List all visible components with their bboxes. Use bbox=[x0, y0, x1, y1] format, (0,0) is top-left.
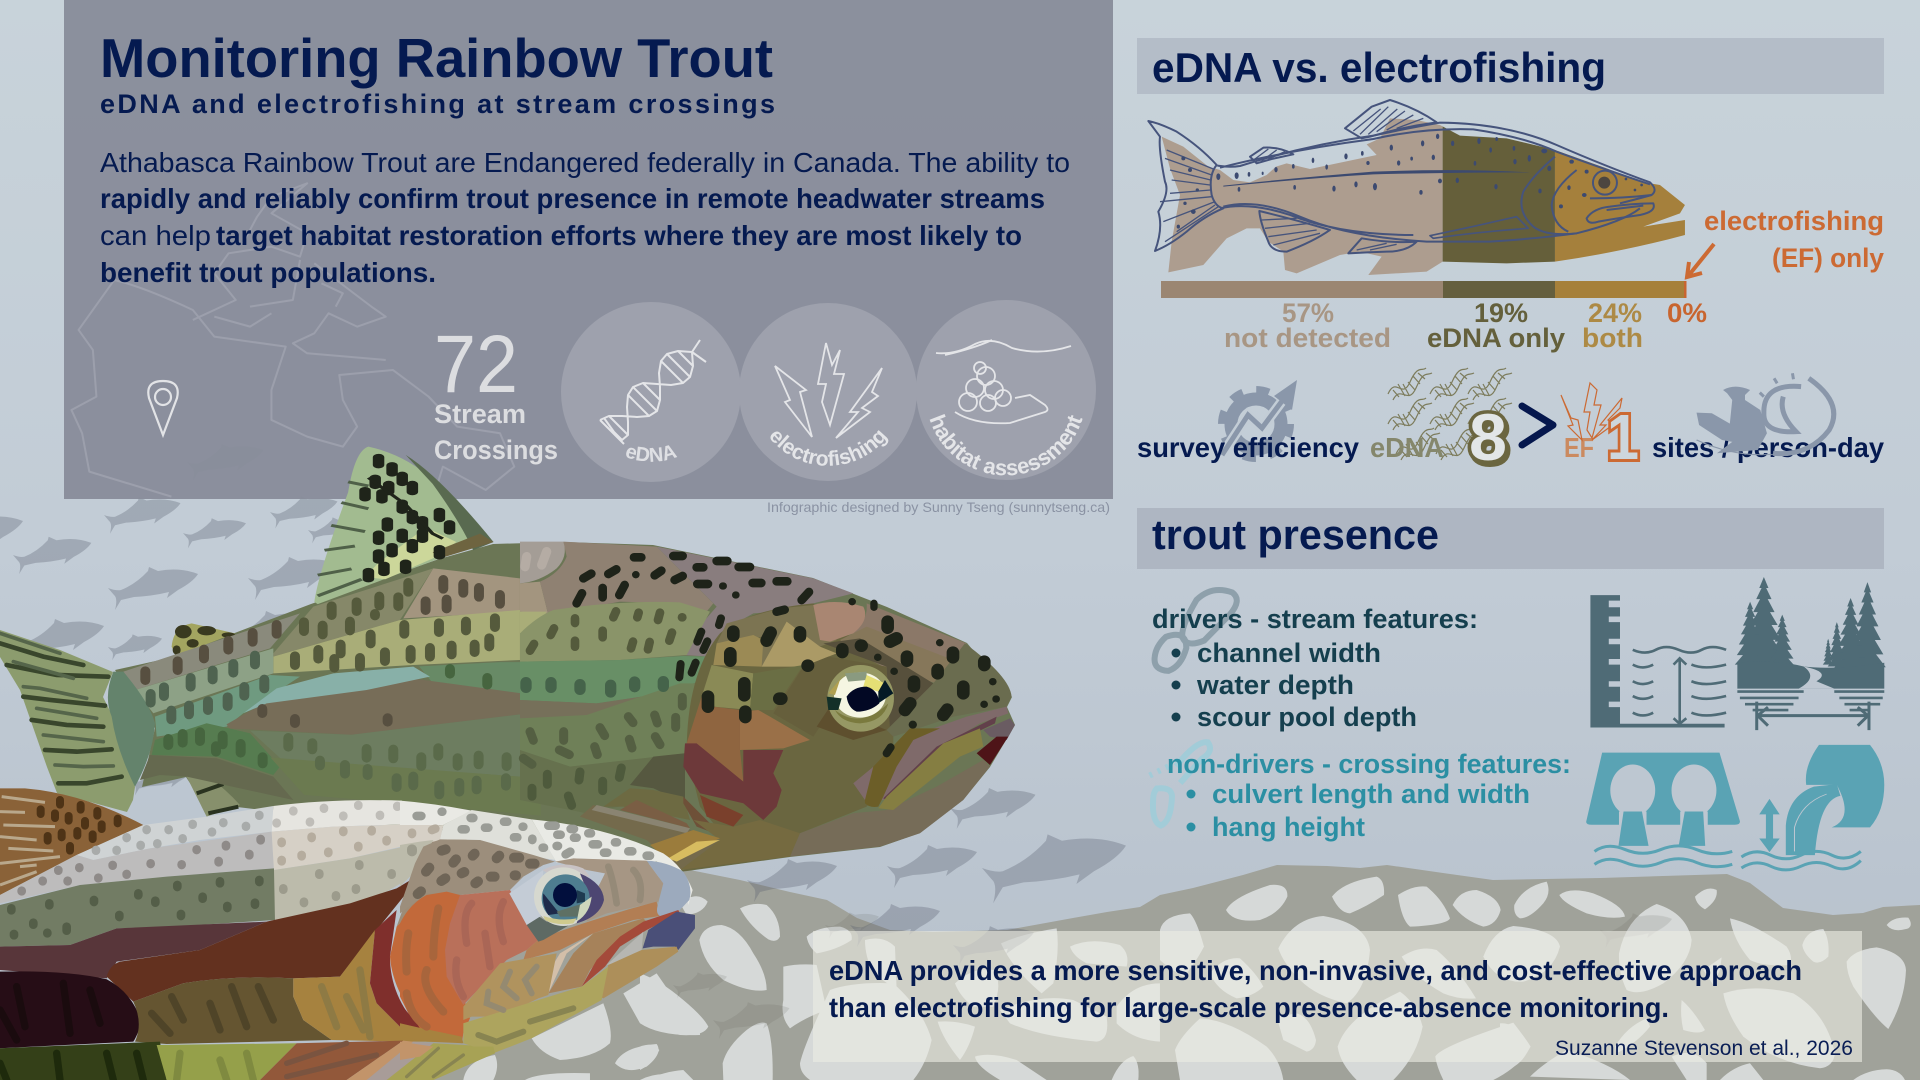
background fish silhouettes bbox=[0, 444, 1126, 965]
method circle: eDNA bbox=[561, 302, 740, 482]
stream driver text: water depth bbox=[1196, 670, 1354, 700]
arrow to 0% bbox=[1687, 244, 1714, 277]
method circle: eDNA: eDNA bbox=[626, 445, 678, 462]
introduction text: Athabasca Rainbow Trout are Endangered federally in Canada. The ability to bbox=[100, 147, 1070, 178]
fish detection graphic bbox=[1148, 100, 1685, 275]
credit line: Infographic designed by Sunny Tseng (sunnytseng.ca) bbox=[767, 499, 1110, 515]
icon: electrofishing bolts bbox=[1561, 383, 1622, 440]
citation: Suzanne Stevenson et al., 2026 bbox=[1555, 1037, 1853, 1060]
panel: trout presence header: trout presence bbox=[1152, 511, 1439, 558]
stacked detection bar bbox=[1161, 281, 1686, 298]
crossing non-driver text: hang height bbox=[1212, 812, 1365, 842]
label: 57% not detected: 57% bbox=[1282, 298, 1334, 328]
number 1: 1 bbox=[1607, 401, 1639, 473]
teal stripe bbox=[243, 667, 430, 713]
label: 24% both bbox=[1582, 298, 1643, 353]
crossing non-driver text bbox=[1167, 749, 1571, 842]
conclusion text: than electrofishing for large-scale presence-absence monitoring. bbox=[829, 992, 1669, 1023]
main trout head and front body bbox=[520, 542, 1015, 872]
icon: hanging culvert bbox=[1741, 745, 1884, 870]
location pin icon bbox=[148, 381, 178, 435]
stat: 72 stream crossings: Crossings bbox=[434, 435, 558, 465]
icon: broken chain bbox=[1150, 742, 1210, 826]
rear body spots bbox=[145, 580, 507, 794]
icon: water depth ruler bbox=[1590, 595, 1726, 727]
conclusion text: eDNA provides a more sensitive, non-invasive, and cost-effective approach bbox=[829, 955, 1802, 986]
label: 19% eDNA only: 19% bbox=[1474, 298, 1528, 328]
survey efficiency row text: survey efficiency bbox=[1137, 432, 1359, 463]
stat: 72 stream crossings: 72 bbox=[434, 319, 518, 410]
foreground trout body bands bbox=[0, 788, 495, 1080]
label: 24% both: 24% bbox=[1588, 298, 1642, 328]
number 8: 8 bbox=[1469, 400, 1507, 474]
label: electrofishing only: (EF) only bbox=[1772, 243, 1884, 273]
stat: 72 stream crossings: Stream bbox=[434, 399, 526, 429]
rear body bands bbox=[108, 568, 520, 800]
introduction text: benefit trout populations. bbox=[100, 257, 436, 288]
map of Canada outline bbox=[71, 183, 514, 497]
gravel stream bed bbox=[350, 865, 1920, 1080]
introduction text: rapidly and reliably confirm trout presence in remote headwater streams bbox=[100, 183, 1045, 214]
label: 0%: 0% bbox=[1667, 298, 1707, 328]
introduction text: can help bbox=[100, 220, 211, 251]
survey efficiency row text: sites / person-day bbox=[1652, 432, 1884, 463]
anal fin bbox=[187, 775, 240, 817]
survey efficiency row text: eDNA bbox=[1370, 432, 1444, 463]
stat: 72 stream crossings bbox=[434, 319, 558, 465]
subtitle: eDNA and electrofishing at stream crossings bbox=[100, 89, 775, 119]
label: electrofishing only bbox=[1704, 206, 1884, 273]
panel: trout presence header bbox=[1137, 508, 1884, 569]
crossing non-driver text: culvert length and width bbox=[1212, 779, 1530, 809]
stream driver text bbox=[1152, 604, 1478, 732]
icon: culvert headwall bbox=[1586, 753, 1740, 867]
title: Monitoring Rainbow Trout bbox=[100, 27, 773, 89]
icon: efficiency gear and arrow bbox=[1222, 380, 1297, 458]
faint fish on gravel bbox=[673, 912, 1672, 1039]
foreground trout head bbox=[400, 801, 695, 1080]
label: electrofishing only: electrofishing bbox=[1704, 206, 1884, 236]
icon: intact chain bbox=[1155, 590, 1237, 671]
icon: channel width stream and forest bbox=[1735, 577, 1886, 730]
stream driver text: drivers - stream features: bbox=[1152, 604, 1478, 634]
illustration: foreground trout bbox=[0, 788, 695, 1080]
label: 57% not detected: not detected bbox=[1224, 323, 1391, 353]
method circle: electrofishing bbox=[740, 303, 916, 481]
label: 19% eDNA only: eDNA only bbox=[1427, 323, 1565, 353]
crossing non-driver text: non-drivers - crossing features: bbox=[1167, 749, 1571, 779]
method circle: habitat assessment: habitat assessment bbox=[930, 414, 1082, 476]
label: 19% eDNA only bbox=[1427, 298, 1565, 353]
icon: angler with sun and moon bbox=[1697, 373, 1834, 455]
introduction text: target habitat restoration efforts where they are most likely to bbox=[216, 220, 1022, 251]
survey efficiency row text bbox=[1137, 432, 1884, 463]
dorsal fin bbox=[314, 447, 493, 604]
method circle: electrofishing: electrofishing bbox=[770, 430, 888, 466]
survey efficiency row text: EF bbox=[1564, 432, 1594, 463]
icon group: eDNA helixes bbox=[1388, 368, 1512, 460]
greater than sign bbox=[1522, 406, 1553, 445]
introduction text bbox=[100, 147, 1070, 288]
mid body bands bbox=[226, 662, 581, 816]
method circle: habitat assessment bbox=[916, 300, 1096, 480]
panel: title and introduction bbox=[64, 0, 1113, 499]
stream driver text: channel width bbox=[1197, 638, 1381, 668]
main trout eye bbox=[827, 665, 894, 732]
conclusion text bbox=[829, 955, 1802, 1023]
label: 24% both: both bbox=[1582, 323, 1643, 353]
panel: eDNA vs electrofishing header bbox=[1137, 38, 1884, 94]
label: 57% not detected bbox=[1224, 298, 1391, 353]
tail fin bbox=[0, 630, 135, 812]
panel: eDNA vs electrofishing header: eDNA vs. electrofishing bbox=[1152, 44, 1606, 91]
callout box bbox=[813, 931, 1862, 1062]
stream driver text: scour pool depth bbox=[1197, 702, 1417, 732]
body base bbox=[115, 542, 1015, 872]
adipose fin bbox=[172, 623, 235, 655]
foreground trout eye bbox=[534, 867, 604, 926]
illustration: main rainbow trout bbox=[0, 447, 1015, 872]
